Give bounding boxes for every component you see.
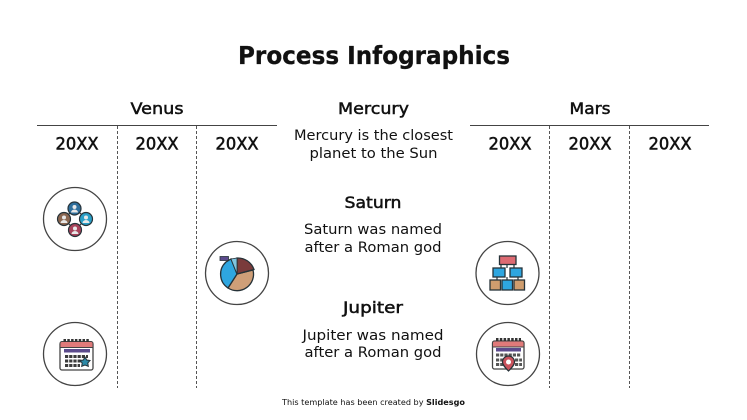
- footer credit: This template has been created by Slidesgo: [281, 398, 465, 407]
- year labels: Venus columns: 20XX: [216, 134, 258, 154]
- icon: calendar with star: [44, 322, 106, 386]
- icon: org chart: [476, 242, 539, 304]
- text block: Jupiter: Jupiter: [342, 298, 403, 317]
- text block: Mercury: [294, 99, 454, 162]
- year labels: Venus columns: 20XX: [136, 134, 178, 154]
- year labels: Mars columns: 20XX: [488, 134, 532, 154]
- text block: Mercury: Mercury: [338, 99, 409, 118]
- text block: Mercury: Mercury is the closest: [294, 128, 454, 144]
- text block: Mercury: planet to the Sun: [310, 146, 438, 162]
- text block: Jupiter: after a Roman god: [304, 345, 442, 361]
- year labels: Venus columns: 20XX: [56, 134, 98, 154]
- text block: Saturn: after a Roman god: [304, 240, 442, 256]
- text block: Saturn: Saturn was named: [304, 222, 442, 238]
- text block: Jupiter: [301, 298, 444, 361]
- column group heading: Venus: Venus: [130, 99, 184, 118]
- year labels: Mars columns: [488, 134, 692, 154]
- column group heading: Mars: Mars: [570, 99, 610, 118]
- text block: Jupiter: Jupiter was named: [301, 328, 444, 344]
- icon: pie chart: [206, 242, 268, 304]
- year labels: Venus columns: [56, 134, 258, 154]
- text block: Saturn: [304, 193, 442, 256]
- year labels: Mars columns: 20XX: [568, 134, 612, 154]
- icon: calendar with location pin: [476, 322, 540, 386]
- title: Process Infographics: [238, 41, 510, 70]
- year labels: Mars columns: 20XX: [648, 134, 692, 154]
- icon: team network: [44, 188, 106, 250]
- text block: Saturn: Saturn: [344, 193, 402, 212]
